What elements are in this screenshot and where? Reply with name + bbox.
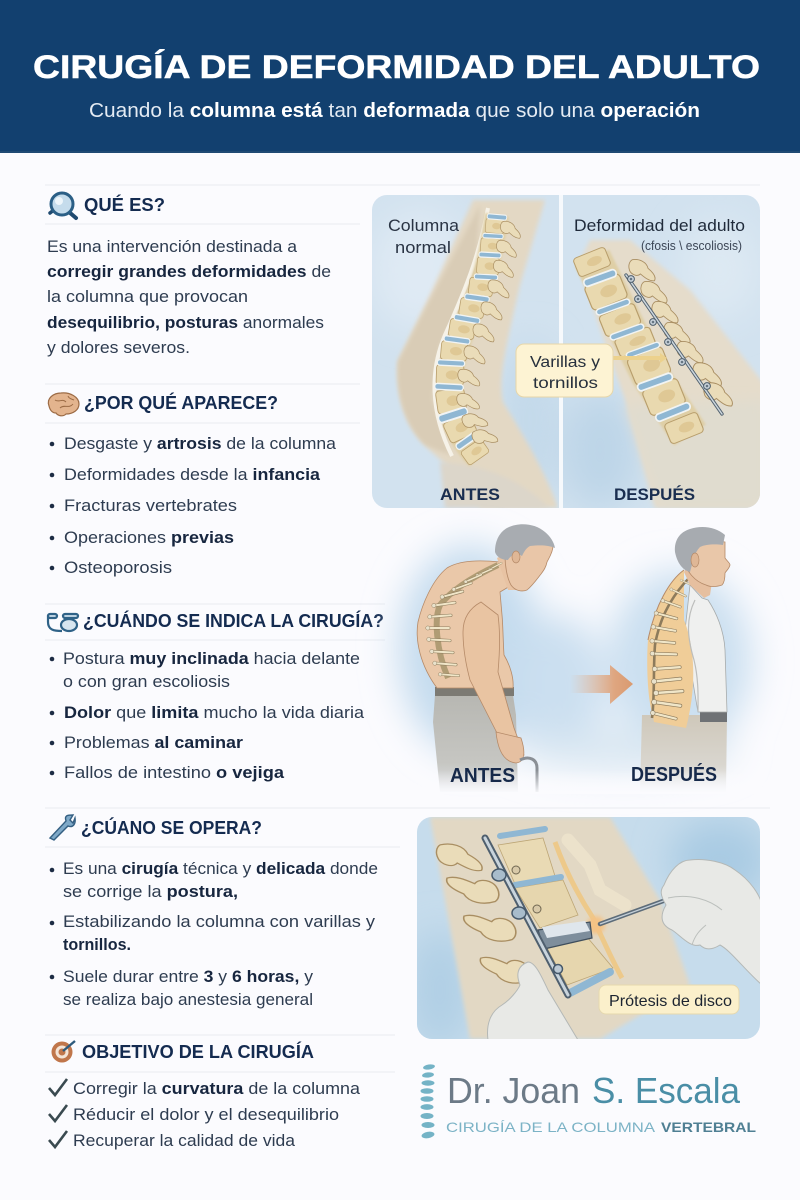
gloved hand right [661,859,762,985]
header banner [0,0,800,153]
paragraph: la columna que provocan [47,288,248,306]
heading: ¿CUÁNDO SE INDICA LA CIRUGÍA? [83,610,384,631]
icon: stethoscope [48,614,78,631]
section: cuano se opera [50,815,378,1009]
label: deformidad del adulto [575,219,744,252]
icon: wrench [50,815,75,840]
bullet list: Osteoporosis [64,559,172,577]
bullet list: Dolor que limita mucho la vida diaria [64,704,365,722]
exposed spine [426,562,503,678]
wordmark: Dr. Joan [447,1070,580,1111]
icon: magnifier [50,193,76,218]
label: antes: ANTES [440,485,500,504]
figure: bent patient [417,524,555,792]
tagline: CIRUGÍA DE LA COLUMNA [446,1119,656,1135]
bullet list [50,860,378,1009]
label: columna normal [388,219,459,253]
nerve [555,842,622,978]
label: columna normal: Columna [388,216,460,235]
bullet list: Operaciones previas [64,529,234,547]
panel: posture before and after [395,524,785,794]
heading: ¿POR QUÉ APARECE? [84,392,278,413]
bullet list: tornillos. [63,936,131,954]
paragraph: corregir grandes deformidades de [47,263,331,281]
bullet list: se realiza bajo anestesia general [63,991,313,1009]
paragraph: y dolores severos. [47,339,190,357]
watercolor background [398,545,752,772]
heading: QUÉ ES? [84,194,165,215]
logo: Dr. Joan S. Escala [420,1064,756,1139]
callout: protesis de disco: Prótesis de disco [609,993,732,1010]
ground fade [395,770,785,794]
bullet list [50,435,337,577]
section: objetivo [49,1041,361,1150]
illustration: normal spine [397,200,558,508]
check list [49,1079,361,1150]
bullet list: se corrige la postura, [63,883,238,901]
label: deformidad del adulto: (cfosis \ escoliosis) [641,239,742,253]
label: despues: DESPUÉS [631,763,717,786]
wordmark [447,1070,741,1111]
ear [512,551,520,563]
hair [675,527,725,572]
neck [684,560,712,598]
check list: Réducir el dolor y el desequilibrio [73,1106,339,1124]
callout arrow [610,353,667,363]
gloved hand left [488,962,578,1040]
icon: brain [48,393,79,416]
callout: varillas y tornillos: tornillos [533,375,598,392]
panel: surgery illustration [410,817,770,1050]
bullet list: o con gran escoliosis [63,673,230,691]
label: despues: DESPUÉS [614,485,695,504]
bullet list: Fallos de intestino o vejiga [64,764,285,782]
ear [691,553,699,567]
tagline [446,1119,756,1135]
callout: varillas y tornillos: Varillas y [530,354,600,371]
hair [495,524,555,560]
section: cuando se indica [48,610,384,782]
rod [485,838,568,995]
heading: ¿CÚANO SE OPERA? [81,817,262,838]
tissue [430,817,690,1039]
bullet list: Suele durar entre 3 y 6 horas, y [63,968,314,986]
vertebrae [434,829,625,993]
figure: corrected patient [640,527,730,792]
check list: Corregir la curvatura de la columna [73,1080,361,1098]
section: por que aparece [48,392,337,577]
callout: varillas y tornillos [516,344,613,397]
subtitle: Cuando la columna está tan deformada que solo una operación [89,100,700,122]
bullet list [50,650,365,782]
arrow: before to after [570,665,633,704]
bullet list: Estabilizando la columna con varillas y [63,913,376,931]
neck [497,550,520,590]
disc prosthesis [538,921,592,949]
paragraph: Es una intervención destinada a [47,238,298,256]
face [683,541,730,586]
spine and rods [650,576,693,721]
bullet list: Problemas al caminar [64,734,244,752]
bullet list: Deformidades desde la infancia [64,466,321,484]
label: deformidad del adulto: Deformidad del adulto [574,216,745,235]
divider between panels [559,195,563,508]
callout: protesis de disco [599,985,739,1014]
icon: target [52,1041,75,1062]
tagline: VERTEBRAL [661,1119,756,1135]
label: antes: ANTES [450,765,515,787]
icon: stylised spine [420,1064,435,1139]
paragraph: desequilibrio, posturas anormales [47,314,324,332]
bullet list: Es una cirugía técnica y delicada donde [63,860,378,878]
label: columna normal: normal [395,238,451,257]
bullet list: Desgaste y artrosis de la columna [64,435,337,453]
wordmark: S. Escala [592,1070,741,1111]
heading: OBJETIVO DE LA CIRUGÍA [82,1041,314,1062]
check list: Recuperar la calidad de vida [73,1132,296,1150]
title: CIRUGÍA DE DEFORMIDAD DEL ADULTO [33,49,760,85]
illustration: deformed spine with rods [573,240,765,508]
forceps [598,899,664,926]
bullet list: Postura muy inclinada hacia delante [63,650,360,668]
paragraph [47,238,331,357]
section: que es [47,193,331,357]
bullet list: Fracturas vertebrates [64,497,237,515]
panel: spine before and after [370,195,765,510]
face [505,544,553,591]
